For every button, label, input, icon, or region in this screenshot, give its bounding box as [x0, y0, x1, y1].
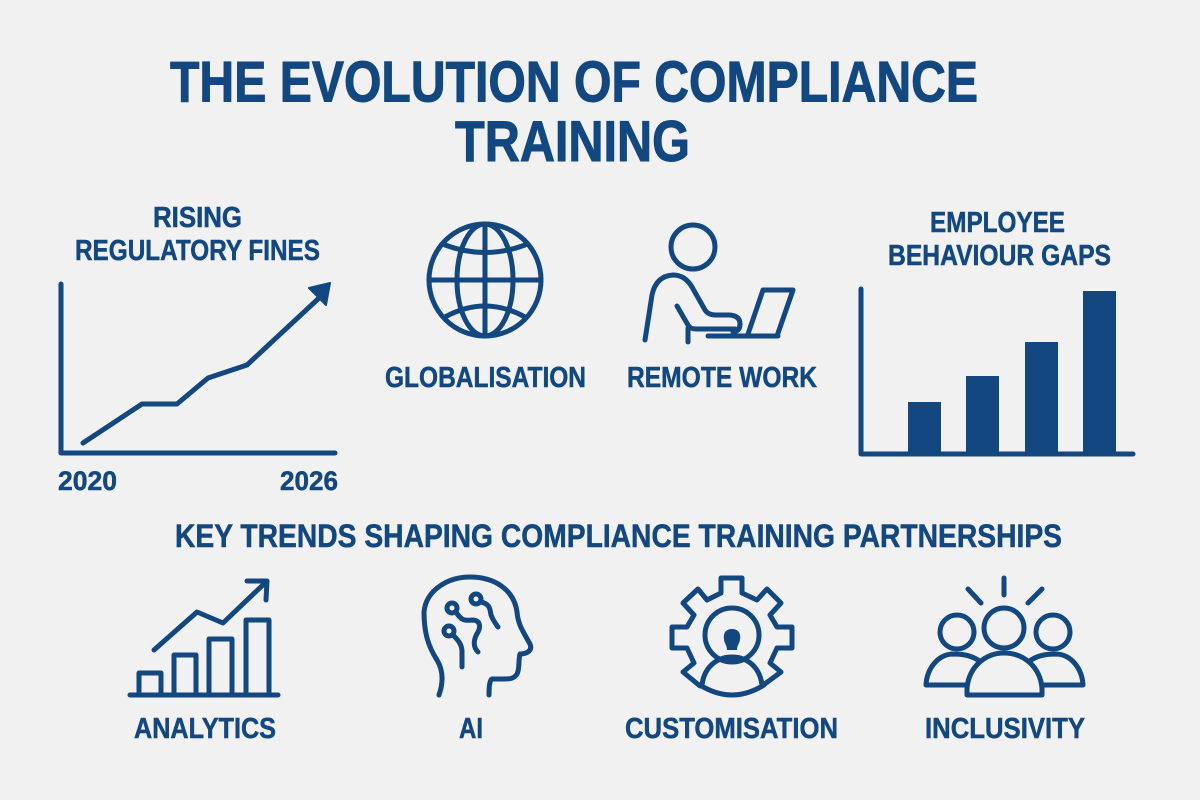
icon: head with circuits: [424, 577, 531, 695]
panel: customisation: [625, 578, 838, 745]
heading: employee behaviour gaps: [888, 207, 1111, 272]
label: customisation: CUSTOMISATION: [625, 713, 838, 745]
title: THE EVOLUTION OF COMPLIANCE: [170, 50, 978, 114]
heading: rising regulatory fines: REGULATORY FINES: [75, 235, 320, 267]
icon: group of people: [926, 578, 1083, 695]
label: globalisation: GLOBALISATION: [385, 362, 586, 394]
panel: employee behaviour gaps: [861, 207, 1133, 454]
panel: remote work: [627, 225, 817, 394]
title: TRAINING: [455, 110, 690, 174]
icon: globe: [429, 224, 541, 336]
panel: ai: [424, 577, 531, 745]
axis label: 2026: 2026: [280, 466, 338, 496]
heading: employee behaviour gaps: BEHAVIOUR GAPS: [888, 240, 1111, 272]
label: inclusivity: INCLUSIVITY: [925, 713, 1085, 745]
axis label: 2020: 2020: [58, 466, 117, 496]
panel: globalisation: [385, 224, 586, 394]
label: ai: AI: [459, 713, 483, 745]
title: [170, 50, 978, 174]
heading: rising regulatory fines: RISING: [153, 202, 242, 234]
panel: rising regulatory fines: [58, 202, 338, 496]
icon: person at laptop: [645, 225, 793, 342]
panel: inclusivity: [925, 578, 1085, 745]
heading: employee behaviour gaps: EMPLOYEE: [930, 207, 1065, 239]
line chart: fines 2020 to 2026: [61, 283, 335, 453]
panel: analytics: [130, 581, 278, 745]
icon: rising bars with arrow: [130, 581, 278, 695]
icon: gear with person: [672, 578, 792, 695]
label: remote work: REMOTE WORK: [627, 362, 817, 394]
bar chart: [861, 289, 1133, 454]
label: analytics: ANALYTICS: [134, 713, 276, 745]
heading: rising regulatory fines: [75, 202, 320, 267]
subtitle: key trends: KEY TRENDS SHAPING COMPLIANCE TRAINING PARTNERSHIPS: [175, 518, 1062, 554]
